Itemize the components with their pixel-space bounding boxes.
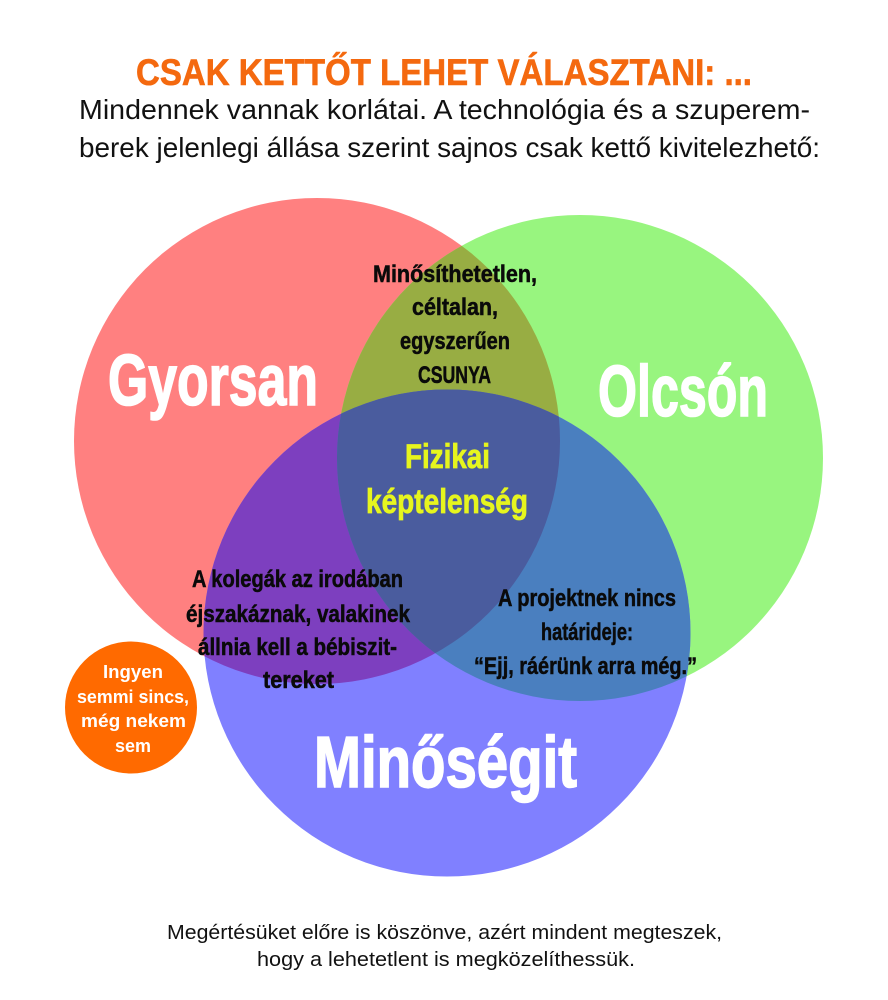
label: Minőségit: Minőségit <box>314 723 577 803</box>
label: Olcsón: Olcsón <box>598 352 768 432</box>
footer note: Megértésüket előre is köszönve, azért mindent megteszek, <box>167 922 722 944</box>
badge text: semmi sincs, <box>77 687 189 707</box>
text: fast and cheap overlap: CSUNYA <box>418 362 491 389</box>
text: cheap and quality overlap <box>474 585 697 680</box>
overlap: fast and cheap <box>341 246 559 654</box>
footer note: hogy a lehetetlent is megközelíthessük. <box>257 949 635 971</box>
text: fast and cheap overlap: céltalan, <box>412 294 498 321</box>
text: fast and quality overlap: állnia kell a bébiszit- <box>198 634 397 661</box>
text: cheap and quality overlap: határideje: <box>541 619 633 646</box>
text: cheap and quality overlap: A projektnek nincs <box>498 585 676 612</box>
subtitle <box>79 94 820 163</box>
text: fast and cheap overlap: egyszerűen <box>400 328 510 355</box>
text: cheap and quality overlap: “Ejj, ráérünk arra még.” <box>474 653 697 680</box>
venn diagram <box>74 198 823 876</box>
text: centre overlap <box>366 438 528 521</box>
text: centre overlap: Fizikai <box>405 438 490 476</box>
text: centre overlap: képtelenség <box>366 483 528 521</box>
badge text: még nekem <box>81 711 186 731</box>
title: CSAK KETTŐT LEHET VÁLASZTANI: ... <box>136 51 752 93</box>
text: fast and cheap overlap <box>373 261 537 389</box>
badge text: Ingyen <box>103 662 163 682</box>
badge text <box>77 662 189 756</box>
label: Gyorsan: Gyorsan <box>108 341 318 421</box>
text: fast and quality overlap: A kolegák az irodában <box>192 566 403 593</box>
overlap: all three <box>337 390 560 653</box>
infographic canvas <box>65 52 823 970</box>
text: fast and cheap overlap: Minősíthetetlen, <box>373 261 537 288</box>
subtitle: berek jelenlegi állása szerint sajnos csak kettő kivitelezhető: <box>79 132 820 163</box>
circle: Olcsón <box>337 215 823 701</box>
overlap: fast and quality <box>204 390 559 684</box>
badge text: sem <box>115 736 151 756</box>
circle: Gyorsan <box>74 198 560 684</box>
text: fast and quality overlap <box>186 566 411 694</box>
text: fast and quality overlap: tereket <box>263 667 334 694</box>
footer note <box>167 922 722 971</box>
badge: orange circle <box>65 642 197 774</box>
text: fast and quality overlap: éjszakáznak, valakinek <box>186 601 411 628</box>
circle: Minőségit <box>204 390 690 876</box>
overlap: cheap and quality <box>337 390 690 701</box>
subtitle: Mindennek vannak korlátai. A technológia és a szuperem- <box>79 94 810 125</box>
